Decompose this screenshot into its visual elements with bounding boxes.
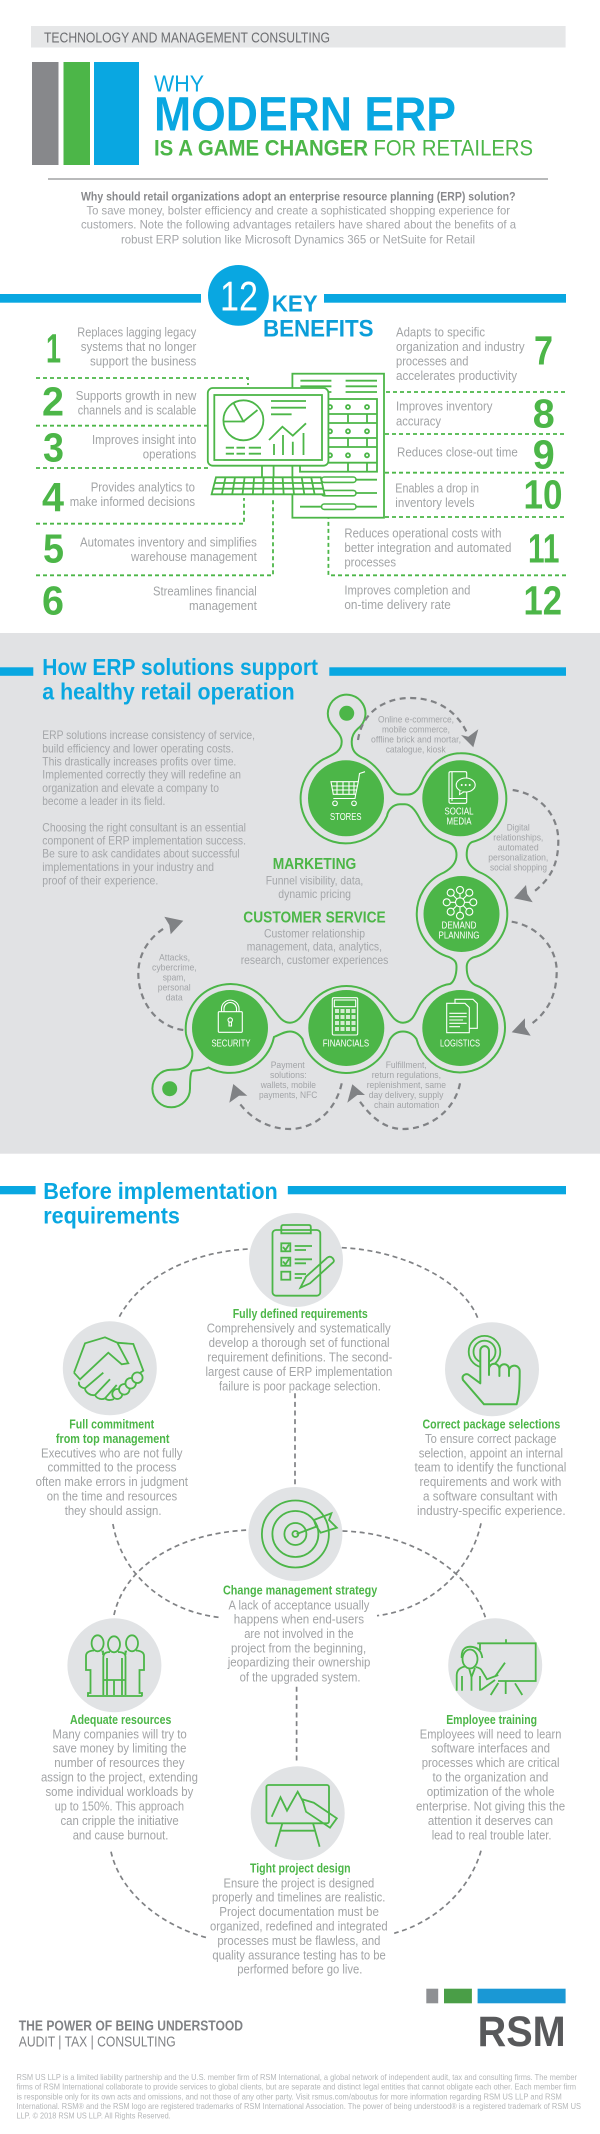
step: adequate resources: Many companies will try to bbox=[52, 1727, 187, 1741]
icon: trainer at board bbox=[448, 1618, 542, 1712]
node: demand planning: PLANNING bbox=[438, 931, 480, 942]
node: stores bbox=[308, 760, 384, 836]
logo bars bbox=[32, 62, 139, 165]
step: employee training: optimization of the whole bbox=[427, 1785, 555, 1799]
label: logistics: chain automation bbox=[374, 1100, 439, 1111]
step: correct package selections bbox=[414, 1322, 566, 1518]
step: adequate resources: up to 150%. This approach bbox=[55, 1799, 184, 1813]
benefit 4 bbox=[42, 474, 195, 520]
footer logo bbox=[426, 1989, 566, 2056]
step: tight project design: Project documentation must be bbox=[219, 1905, 379, 1919]
legal text: RSM US LLP is a limited liability partnership and the U.S. member firm of RSM International, a global network of independent audit, tax and consulting firms. The member bbox=[16, 2073, 577, 2082]
benefit 6: management bbox=[189, 599, 257, 613]
label: security: cybercrime, bbox=[152, 963, 197, 974]
body text bbox=[42, 728, 255, 887]
step: change management strategy bbox=[223, 1487, 377, 1684]
benefit 3: 3 bbox=[43, 425, 64, 471]
label: financials bbox=[259, 1060, 317, 1101]
step: full commitment: on the time and resources bbox=[47, 1490, 177, 1504]
icon: presentation board bbox=[251, 1766, 345, 1860]
step: employee training: to the organization and bbox=[432, 1771, 548, 1785]
benefit 6 bbox=[42, 577, 257, 623]
step: fully defined requirements: develop a thorough set of functional bbox=[209, 1336, 390, 1350]
step: employee training: processes which are critical bbox=[422, 1756, 560, 1770]
benefit 3 bbox=[43, 425, 196, 471]
label: stores: Online e-commerce, bbox=[378, 715, 454, 726]
label: logistics bbox=[367, 1060, 446, 1111]
step: adequate resources: save money by limiting the bbox=[53, 1742, 186, 1756]
heading: before implementation: Before implementation bbox=[43, 1178, 278, 1204]
customer service text: research, customer experiences bbox=[241, 953, 388, 967]
flow outline bbox=[152, 695, 507, 1107]
node: social media: MEDIA bbox=[446, 817, 472, 828]
label: financials: Payment bbox=[271, 1060, 305, 1071]
label: stores: catalogue, kiosk bbox=[386, 745, 446, 756]
intro text: robust ERP solution like Microsoft Dynamics 365 or NetSuite for Retail bbox=[121, 232, 475, 246]
benefit 6: Streamlines financial bbox=[153, 584, 257, 598]
benefit 8: accuracy bbox=[396, 414, 442, 428]
panel: how ERP solutions support bbox=[0, 633, 600, 1154]
benefit 3: Improves insight into bbox=[92, 433, 196, 447]
benefit 5: warehouse management bbox=[130, 550, 257, 564]
node: social media bbox=[422, 760, 498, 836]
heading: 12 key benefits: 12 bbox=[220, 273, 258, 320]
benefit 4: make informed decisions bbox=[70, 495, 195, 509]
heading: how ERP solutions: How ERP solutions support bbox=[42, 654, 318, 680]
benefit 11: processes bbox=[344, 556, 396, 570]
marketing text: Funnel visibility, data, bbox=[266, 874, 363, 888]
step: fully defined requirements: largest cause of ERP implementation bbox=[206, 1365, 392, 1379]
label: security: spam, bbox=[163, 973, 186, 984]
body text: Implemented correctly they will redefine an bbox=[42, 768, 241, 782]
step: adequate resources: can cripple the initiative bbox=[60, 1814, 179, 1828]
benefit 12: Improves completion and bbox=[344, 584, 470, 598]
node: logistics: LOGISTICS bbox=[440, 1039, 480, 1050]
benefit 7: organization and industry bbox=[396, 340, 525, 354]
label: security: data bbox=[166, 993, 183, 1004]
body text: This drastically increases profits over time. bbox=[42, 754, 236, 768]
icon: clicking hand bbox=[445, 1322, 539, 1416]
node: financials: FINANCIALS bbox=[323, 1039, 369, 1050]
step: tight project design: organized, redefined and integrated bbox=[210, 1919, 388, 1933]
step: employee training: Employee training bbox=[446, 1713, 537, 1727]
benefit 8: 8 bbox=[533, 390, 555, 436]
step: change management strategy: Change management strategy bbox=[223, 1584, 377, 1598]
intro text: Why should retail organizations adopt an enterprise resource planning (ERP) solution? bbox=[81, 189, 516, 203]
heading: 12 key benefits: KEY bbox=[272, 291, 318, 317]
benefit 10: Enables a drop in bbox=[395, 482, 479, 496]
benefit 8 bbox=[396, 390, 555, 436]
step: employee training: enterprise. Not giving this the bbox=[416, 1799, 565, 1813]
step: change management strategy: project from the beginning, bbox=[231, 1641, 366, 1655]
body text: implementations in your industry and bbox=[42, 860, 214, 874]
label: security: Attacks, bbox=[159, 953, 190, 964]
arrow: financials to security bbox=[229, 1083, 342, 1129]
benefit 4: Provides analytics to bbox=[91, 481, 195, 495]
label: security bbox=[152, 953, 197, 1004]
step: correct package selections: requirements and work with bbox=[420, 1475, 561, 1489]
step: correct package selections: team to identify the functional bbox=[414, 1461, 566, 1475]
arrow: logistics to financials bbox=[347, 1083, 460, 1129]
panel: 12 key benefits bbox=[0, 265, 566, 623]
customer service text: CUSTOMER SERVICE bbox=[243, 909, 386, 926]
step: correct package selections: industry-specific experience. bbox=[417, 1504, 566, 1518]
body text: build efficiency and lower operating costs. bbox=[42, 741, 234, 755]
step: employee training: Employees will need to learn bbox=[420, 1727, 561, 1741]
label: stores: offline brick and mortar, bbox=[371, 735, 461, 746]
step: tight project design bbox=[210, 1766, 388, 1977]
body text: proof of their experience. bbox=[42, 873, 158, 887]
body text: organization and elevate a company to bbox=[42, 781, 219, 795]
benefit 7 bbox=[396, 326, 553, 383]
benefit 2 bbox=[42, 379, 197, 425]
step: correct package selections: a software consultant with bbox=[423, 1490, 558, 1504]
label: financials: wallets, mobile bbox=[260, 1080, 316, 1091]
step: adequate resources: some individual workloads by bbox=[46, 1785, 194, 1799]
label: social media: automated bbox=[498, 843, 539, 854]
benefit 6: 6 bbox=[42, 577, 64, 623]
benefit 1: support the business bbox=[90, 354, 196, 368]
icon: clipboard bbox=[249, 1213, 343, 1307]
label: financials: payments, NFC bbox=[259, 1090, 317, 1101]
benefit 5 bbox=[43, 525, 257, 571]
step: change management strategy: jeopardizing their ownership bbox=[227, 1656, 370, 1670]
benefit 5: Automates inventory and simplifies bbox=[80, 536, 257, 550]
node: social media: SOCIAL bbox=[444, 807, 474, 818]
header strip: TECHNOLOGY AND MANAGEMENT CONSULTING bbox=[44, 31, 330, 47]
node: security bbox=[192, 990, 268, 1066]
benefit 9 bbox=[397, 431, 555, 477]
heading: how ERP solutions: a healthy retail operation bbox=[42, 678, 295, 704]
heading: 12 key benefits: BENEFITS bbox=[263, 316, 374, 343]
step: employee training bbox=[416, 1618, 565, 1842]
title: WHY bbox=[154, 70, 204, 96]
benefit 11 bbox=[344, 525, 560, 571]
benefit 1: Replaces lagging legacy bbox=[77, 326, 197, 340]
label: stores: mobile commerce, bbox=[382, 725, 450, 736]
title: IS A GAME CHANGER bbox=[154, 135, 368, 160]
arrow: security to stores bbox=[138, 917, 183, 1030]
benefit 4: 4 bbox=[42, 474, 64, 520]
step: correct package selections: To ensure correct package bbox=[425, 1432, 556, 1446]
marketing text: MARKETING bbox=[273, 856, 356, 873]
intro text: customers. Note the following advantages retailers have shared about the benefits of a bbox=[81, 218, 516, 232]
heading: 12 key benefits bbox=[0, 265, 566, 343]
benefit 12 bbox=[344, 577, 562, 623]
marketing text: dynamic pricing bbox=[278, 887, 351, 901]
step: change management strategy: A lack of acceptance usually bbox=[228, 1598, 370, 1612]
label: social media: personalization, bbox=[488, 853, 548, 864]
step: adequate resources: assign to the project, extending bbox=[41, 1771, 198, 1785]
customer service text: Customer relationship bbox=[264, 926, 365, 940]
heading: before implementation bbox=[0, 1178, 566, 1228]
footer tagline bbox=[19, 2019, 243, 2051]
footer tagline: AUDIT | TAX | CONSULTING bbox=[19, 2035, 176, 2051]
intro text bbox=[81, 189, 516, 246]
benefit 7: 7 bbox=[534, 327, 553, 373]
panel: before implementation requirements bbox=[0, 1178, 566, 1977]
label: financials: solutions: bbox=[270, 1070, 307, 1081]
benefit 7: processes and bbox=[396, 354, 468, 368]
customer service text bbox=[241, 909, 388, 967]
node: stores: STORES bbox=[330, 812, 362, 823]
title bbox=[154, 70, 533, 160]
label: security: personal bbox=[158, 983, 191, 994]
legal text bbox=[16, 2073, 581, 2121]
node: security: SECURITY bbox=[212, 1039, 251, 1050]
step: fully defined requirements: Fully defined requirements bbox=[233, 1307, 368, 1321]
step: tight project design: Tight project design bbox=[250, 1862, 351, 1876]
label: social media: relationships, bbox=[493, 833, 543, 844]
benefit 3: operations bbox=[143, 448, 196, 462]
title: MODERN ERP bbox=[154, 89, 456, 142]
benefit 5: 5 bbox=[43, 525, 64, 571]
node: demand planning: DEMAND bbox=[442, 921, 476, 932]
label: logistics: return regulations, bbox=[372, 1070, 441, 1081]
step: tight project design: properly and timelines are realistic. bbox=[212, 1891, 385, 1905]
label: logistics: day delivery, supply bbox=[369, 1090, 444, 1101]
label: stores bbox=[371, 715, 461, 756]
benefit 10: inventory levels bbox=[395, 496, 474, 510]
body text: component of ERP implementation success. bbox=[42, 834, 246, 848]
benefit 9: Reduces close-out time bbox=[397, 445, 518, 459]
benefit 11: Reduces operational costs with bbox=[344, 527, 501, 541]
arrow: social media to demand planning bbox=[513, 790, 558, 902]
step: employee training: attention it deserves can bbox=[428, 1814, 553, 1828]
step: fully defined requirements bbox=[206, 1213, 392, 1393]
step: change management strategy: are not involved in the bbox=[244, 1627, 354, 1641]
legal text: firms of RSM International collaborate to provide services to global clients, but are separate and distinct legal entities that cannot obligate each other. Each member firm bbox=[16, 2083, 576, 2092]
benefit 8: Improves inventory bbox=[396, 400, 493, 414]
node: financials bbox=[308, 990, 384, 1066]
node: logistics bbox=[422, 990, 498, 1066]
icon: target bbox=[248, 1487, 342, 1581]
step: adequate resources bbox=[41, 1618, 198, 1842]
benefit 10 bbox=[395, 471, 562, 517]
label: social media: social shopping bbox=[490, 863, 547, 874]
benefit 12: 12 bbox=[524, 577, 562, 623]
step: full commitment: Full commitment bbox=[69, 1418, 155, 1432]
step: full commitment bbox=[36, 1321, 188, 1518]
intro text: To save money, bolster efficiency and create a sophisticated shopping experience for bbox=[86, 203, 510, 217]
title: FOR RETAILERS bbox=[374, 135, 533, 160]
step: adequate resources: number of resources they bbox=[54, 1756, 185, 1770]
benefit 7: Adapts to specific bbox=[396, 326, 485, 340]
legal text: is responsible only for its own acts and omissions, and not those of any other party. Visit rsmus.com/aboutus for more information regarding RSM US LLP and RSM bbox=[16, 2092, 562, 2101]
footer tagline: THE POWER OF BEING UNDERSTOOD bbox=[19, 2019, 243, 2035]
body text: ERP solutions increase consistency of service, bbox=[42, 728, 255, 742]
benefit 7: accelerates productivity bbox=[396, 369, 518, 383]
label: social media: Digital bbox=[507, 823, 530, 834]
benefit 1 bbox=[46, 326, 197, 372]
node: demand planning bbox=[424, 876, 500, 952]
heading: before implementation: requirements bbox=[43, 1202, 180, 1228]
benefit 2: 2 bbox=[42, 379, 64, 425]
step: fully defined requirements: failure is poor package selection. bbox=[219, 1379, 381, 1393]
step: correct package selections: Correct package selections bbox=[422, 1418, 560, 1432]
step: adequate resources: Adequate resources bbox=[70, 1713, 171, 1727]
benefit 9: 9 bbox=[533, 431, 555, 477]
arrow: stores to social media bbox=[358, 698, 478, 747]
benefit 12: on-time delivery rate bbox=[344, 598, 451, 612]
body text: become a leader in its field. bbox=[42, 794, 165, 808]
label: logistics: Fulfillment, bbox=[386, 1060, 427, 1071]
marketing text bbox=[266, 856, 363, 901]
benefit 1: 1 bbox=[46, 326, 61, 372]
benefit 11: better integration and automated bbox=[344, 541, 511, 555]
step: tight project design: Ensure the project is designed bbox=[224, 1876, 374, 1890]
label: social media bbox=[488, 823, 548, 874]
benefit 10: 10 bbox=[524, 471, 562, 517]
step: tight project design: performed before go live. bbox=[237, 1963, 362, 1977]
step: change management strategy: happens when end-users bbox=[234, 1613, 364, 1627]
benefit 1: systems that no longer bbox=[81, 340, 196, 354]
customer service text: management, data, analytics, bbox=[247, 940, 382, 954]
step: full commitment: they should assign. bbox=[65, 1504, 162, 1518]
step: full commitment: Executives who are not fully bbox=[41, 1446, 183, 1460]
icon: computer and server bbox=[208, 374, 384, 518]
header strip bbox=[31, 26, 566, 48]
step: correct package selections: selection, appoint an internal bbox=[419, 1446, 563, 1460]
benefit 2: Supports growth in new bbox=[76, 389, 197, 403]
step: full commitment: often make errors in judgment bbox=[36, 1475, 188, 1489]
body text: Be sure to ask candidates about successful bbox=[42, 847, 240, 861]
step: tight project design: quality assurance testing has to be bbox=[212, 1948, 386, 1962]
icon: people bbox=[67, 1618, 161, 1712]
footer logo: RSM bbox=[478, 2008, 566, 2056]
step: full commitment: committed to the process bbox=[48, 1461, 176, 1475]
heading: how ERP solutions bbox=[0, 654, 566, 704]
arrow: demand planning to logistics bbox=[512, 922, 557, 1036]
legal text: LLP. © 2018 RSM US LLP. All Rights Reserved. bbox=[16, 2112, 171, 2121]
body text: Choosing the right consultant is an essential bbox=[42, 820, 246, 834]
step: fully defined requirements: Comprehensively and systematically bbox=[207, 1322, 391, 1336]
step: adequate resources: and cause burnout. bbox=[73, 1828, 168, 1842]
benefit 11: 11 bbox=[528, 525, 560, 571]
dashed connectors bbox=[111, 1248, 485, 1938]
icon: handshake bbox=[63, 1321, 157, 1415]
label: logistics: replenishment, same bbox=[367, 1080, 446, 1091]
step: tight project design: processes must be flawless, and bbox=[217, 1934, 380, 1948]
benefit 2: channels and is scalable bbox=[78, 403, 196, 417]
step: change management strategy: of the upgraded system. bbox=[240, 1670, 360, 1684]
step: employee training: software interfaces and bbox=[431, 1742, 550, 1756]
step: full commitment: from top management bbox=[56, 1432, 170, 1446]
step: fully defined requirements: requirement definitions. The second- bbox=[207, 1350, 392, 1364]
step: employee training: lead to real trouble later. bbox=[432, 1828, 552, 1842]
